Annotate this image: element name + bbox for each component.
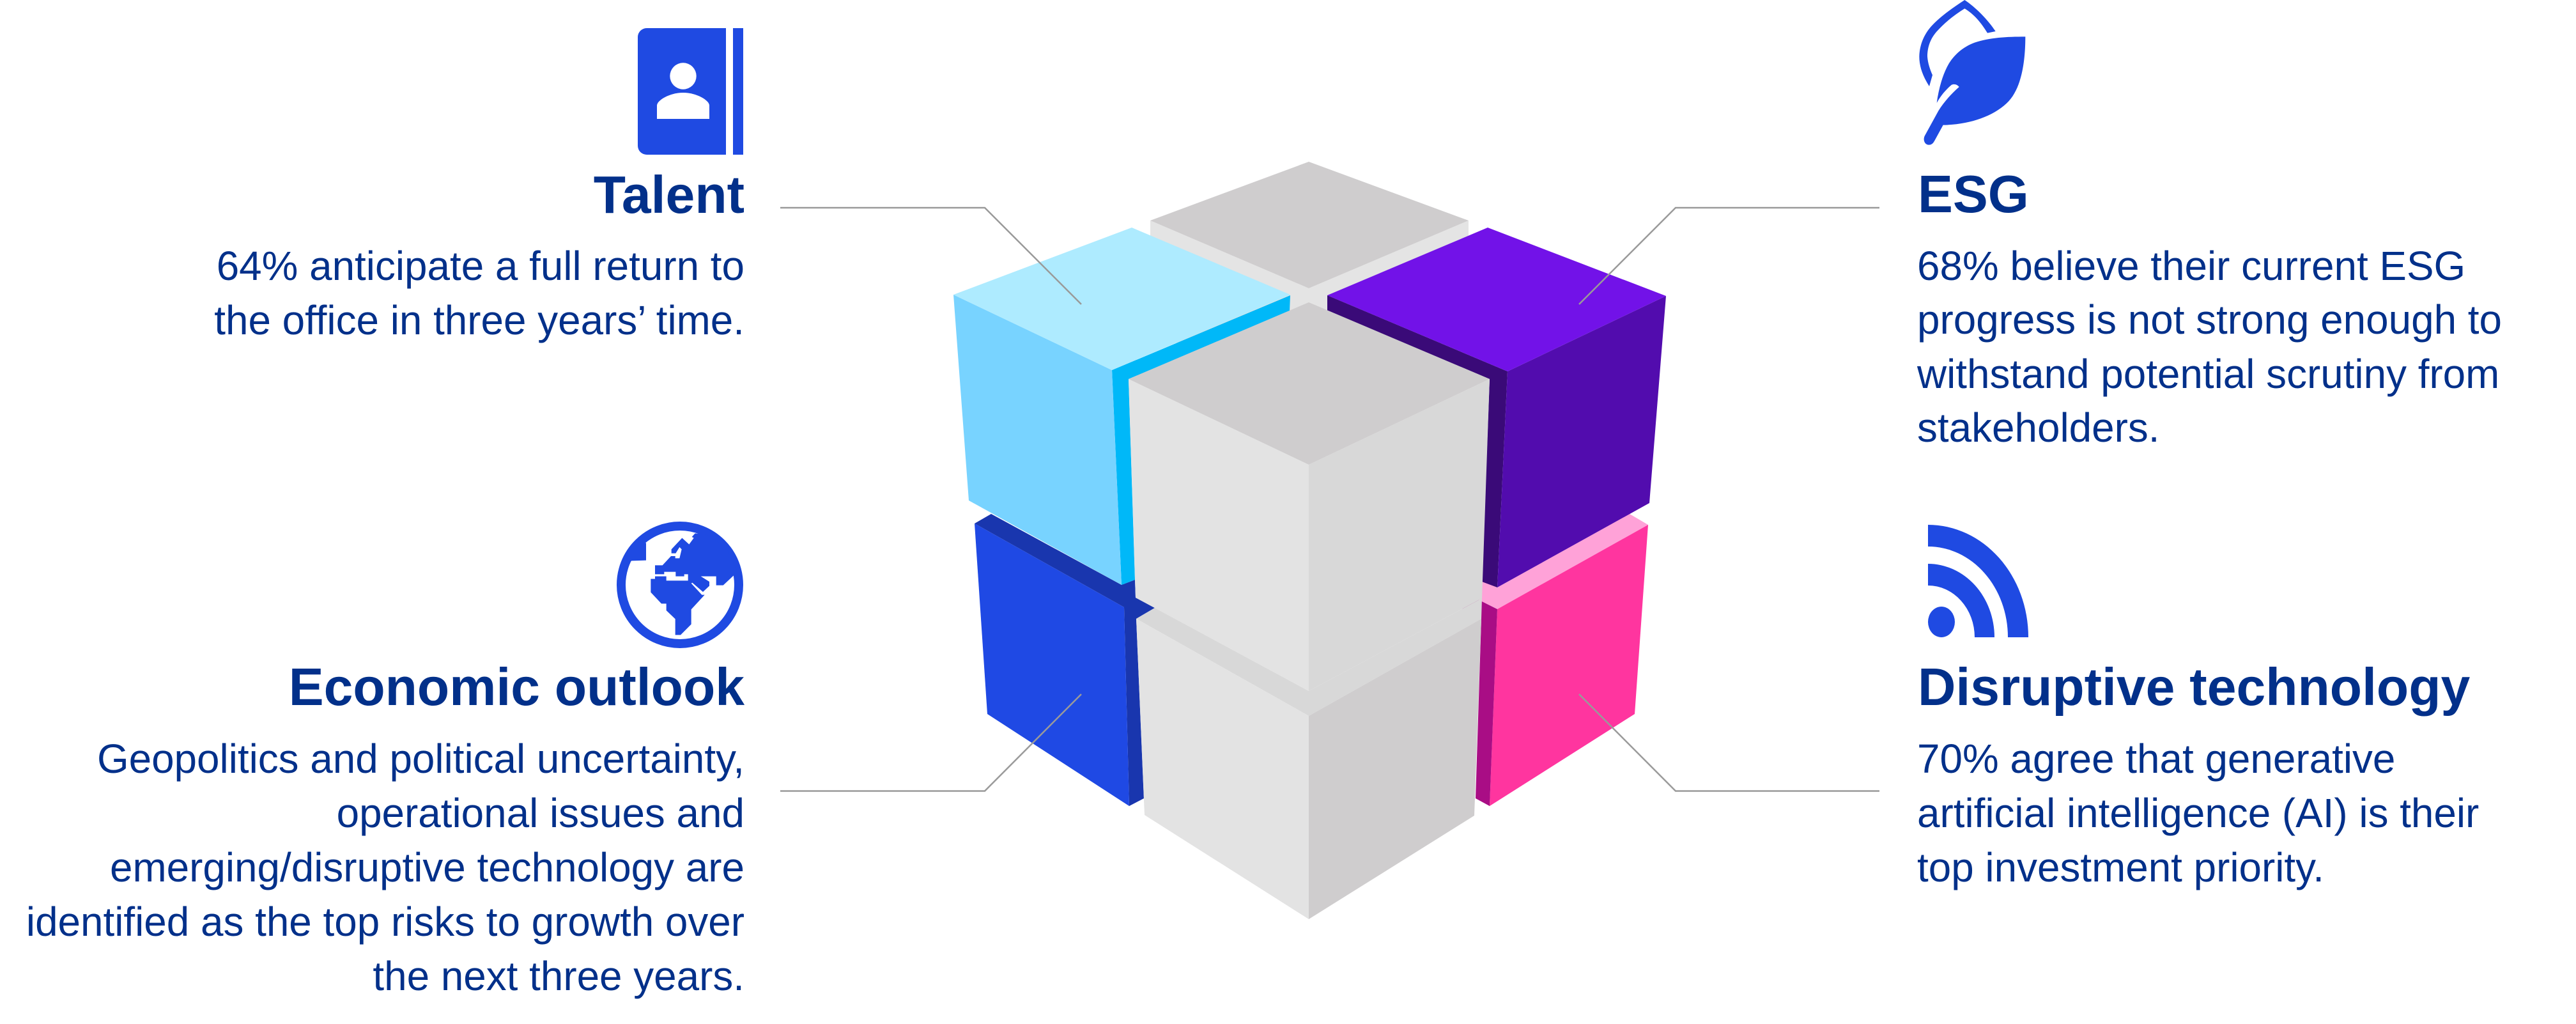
text: economic outlook statement: emerging/disruptive technology are [110, 844, 744, 890]
front lower grey block [1136, 598, 1482, 919]
text: economic outlook statement: identified as the top risks to growth over [26, 899, 744, 945]
text: ESG statistic: 68% believe their current ESG [1917, 243, 2465, 289]
back grey block [1150, 162, 1469, 396]
text: ESG statistic: stakeholders. [1917, 405, 2159, 451]
text: economic outlook statement: the next three years. [373, 953, 744, 999]
front upper grey block [1129, 302, 1490, 691]
icon: address book with person [638, 28, 743, 155]
icon: globe [621, 526, 739, 644]
text: talent statistic: 64% anticipate a full return to [217, 243, 744, 289]
text: economic outlook statement: Geopolitics and political uncertainty, [97, 736, 744, 782]
text: ESG statistic: withstand potential scrutiny from [1917, 351, 2499, 397]
heading: ESG: ESG [1918, 165, 2029, 224]
text: ESG statistic: progress is not strong enough to [1917, 297, 2502, 343]
icon: signal waves [1928, 525, 2028, 637]
text: disruptive technology statistic: artificial intelligence (AI) is their [1917, 790, 2479, 836]
icon: leaves [1919, 0, 2025, 145]
light blue block: talent [953, 228, 1290, 585]
text: disruptive technology statistic: top investment priority. [1917, 844, 2324, 890]
panel: talent [214, 28, 744, 343]
purple block: ESG [1327, 228, 1666, 587]
leader line: economic outlook [780, 694, 1081, 791]
text: economic outlook statement: operational issues and [337, 790, 744, 836]
text: disruptive technology statistic: 70% agree that generative [1917, 736, 2395, 782]
leader line: disruptive technology [1579, 694, 1879, 791]
text: talent statistic: the office in three years’ time. [214, 297, 744, 343]
leader line: ESG [1579, 208, 1879, 304]
leader line: talent [780, 208, 1081, 304]
panel: ESG [1917, 0, 2502, 451]
panel: economic outlook [26, 526, 744, 999]
isometric cube graphic [953, 162, 1666, 919]
panel: disruptive technology [1917, 525, 2479, 890]
heading: talent: Talent [594, 166, 744, 224]
pink block: disruptive technology [1462, 514, 1648, 806]
blue block: economic outlook [975, 514, 1155, 806]
heading: economic outlook: Economic outlook [289, 658, 744, 717]
heading: disruptive technology: Disruptive technology [1918, 658, 2470, 717]
